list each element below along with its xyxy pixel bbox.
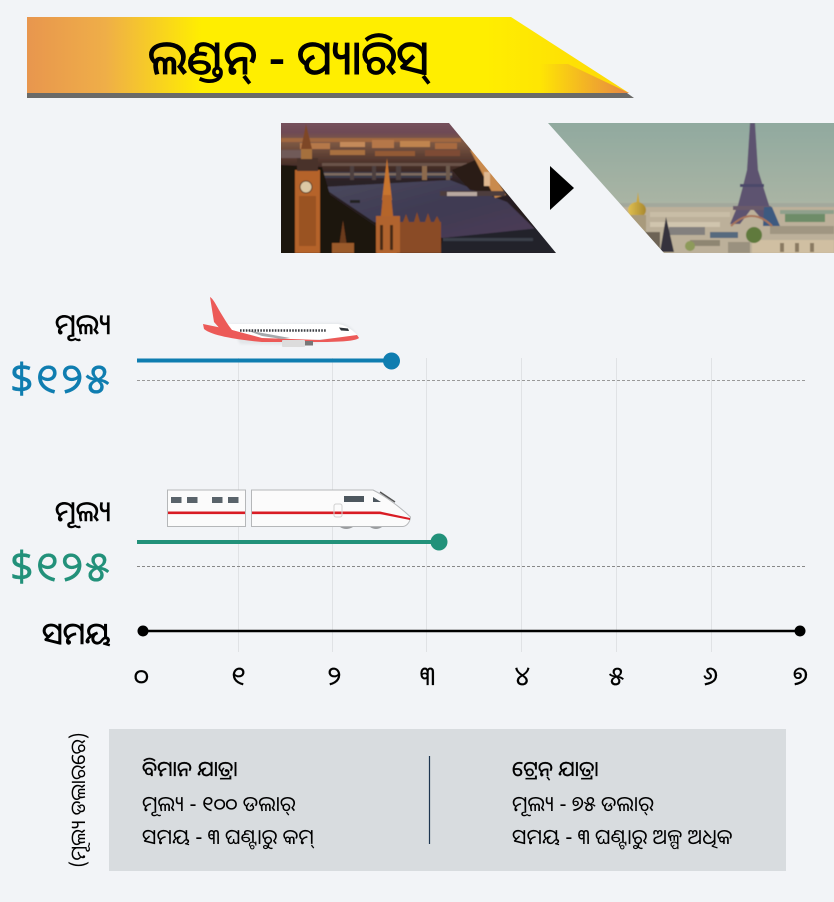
icon: train (168, 490, 410, 529)
text: train summary: ସମୟ - ୩ ଘଣ୍ଟାରୁ ଅଳ୍ପ ଅଧିକ (512, 823, 733, 851)
rotated axis note: (ମୂଲ୍ୟ ଡଲାରରେ) (64, 732, 91, 868)
axis labels: ୩ (420, 657, 435, 693)
axis labels: ୨ (327, 657, 342, 693)
label: price, train: ମୂଲ୍ୟ (55, 492, 111, 530)
text: flight summary: ବିମାନ ଯାତ୍ରା (142, 755, 238, 783)
axis labels: ୬ (703, 657, 718, 693)
label: price, flight: ମୂଲ୍ୟ (55, 305, 111, 343)
bar: train time (137, 534, 448, 550)
photo: London (281, 123, 556, 253)
title: ଲଣ୍ଡନ୍ - ପ୍ୟାରିସ୍ (148, 24, 429, 88)
text: flight summary (142, 755, 314, 851)
grid lines (238, 358, 712, 652)
text: train summary: ଟ୍ରେନ୍ ଯାତ୍ରା (512, 755, 599, 783)
title banner (27, 17, 634, 98)
text: flight summary: ସମୟ - ୩ ଘଣ୍ଟାରୁ କମ୍ (142, 823, 314, 851)
bar: flight time (137, 352, 400, 370)
axis labels: ୭ (793, 657, 808, 693)
panel divider (428, 756, 430, 844)
axis labels (134, 657, 808, 693)
axis labels: ୦ (134, 657, 149, 693)
axis labels: ୧ (231, 657, 246, 693)
icon: airplane (203, 297, 359, 347)
label: time: ସମୟ (42, 612, 111, 653)
value: flight price: $୧୨୫ (10, 350, 111, 406)
text: train summary: ମୂଲ୍ୟ - ୭୫ ଡଲାର୍ (512, 790, 654, 818)
panel: comparison background (109, 729, 786, 871)
value: train price: $୧୨୫ (10, 538, 111, 594)
photo: Paris (543, 118, 834, 258)
axis labels: ୪ (515, 657, 530, 693)
arrow: London to Paris (550, 166, 574, 210)
time axis (138, 626, 806, 636)
text: flight summary: ମୂଲ୍ୟ - ୧୦୦ ଡଲାର୍ (142, 790, 296, 818)
axis labels: ୫ (609, 657, 624, 693)
text: train summary (512, 755, 733, 851)
